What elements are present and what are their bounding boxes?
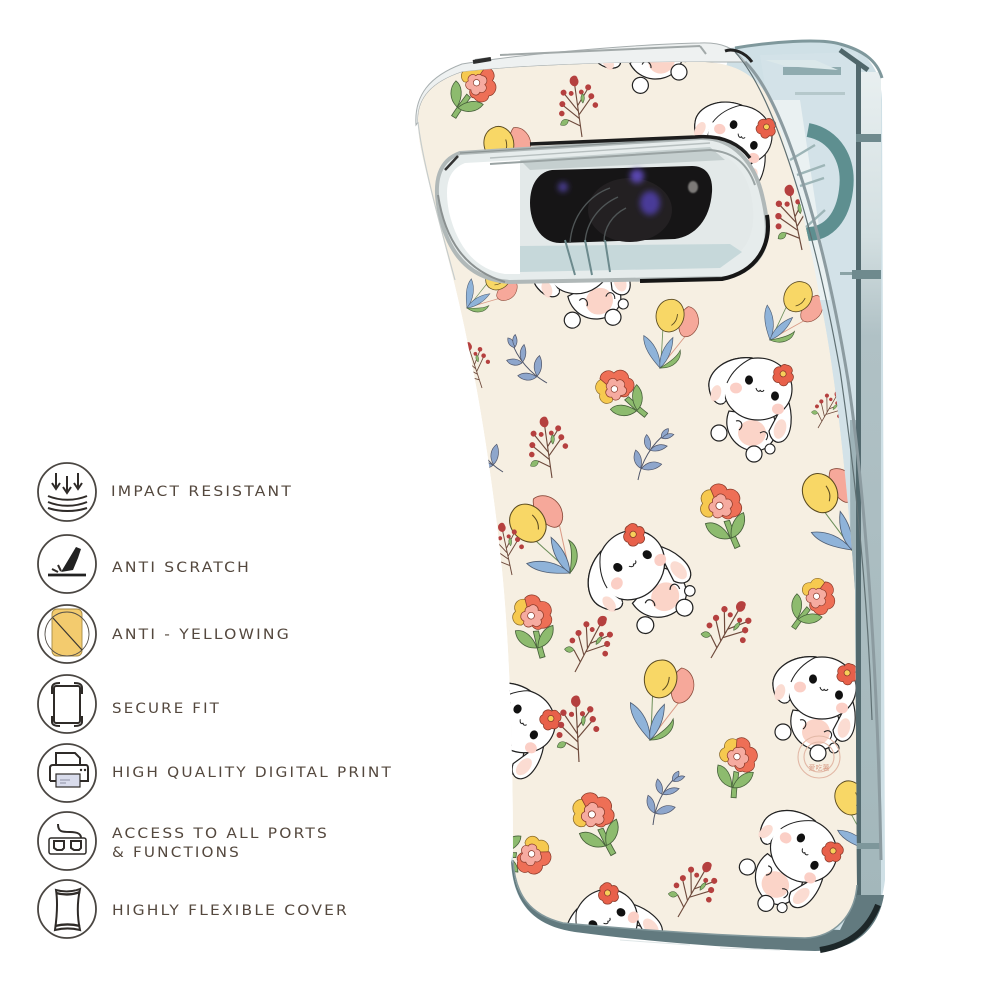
berry: right <box>700 601 752 658</box>
berry: lower left <box>556 696 600 762</box>
flower: top left <box>450 69 496 119</box>
bunny: top <box>598 62 688 94</box>
case edge strokes <box>418 50 881 938</box>
flower: mid <box>595 370 648 418</box>
berry: centre <box>564 616 613 672</box>
label: anti scratch: ANTI SCRATCH <box>112 560 251 576</box>
bunny: upper right <box>694 102 776 182</box>
camera cutout <box>437 137 768 282</box>
feature: access to all ports and functions <box>38 812 329 870</box>
clear case top rim <box>416 43 745 125</box>
feature: anti scratch <box>38 535 251 593</box>
feature: impact resistant <box>38 463 293 521</box>
bunny: left edge <box>510 682 562 780</box>
icon: flexible cover <box>38 880 96 938</box>
watermark stamp: 爱吃薯 <box>808 763 830 772</box>
feature: highly flexible cover <box>38 880 349 938</box>
bunny: lower right <box>738 810 844 914</box>
bunny: bottom <box>568 882 663 930</box>
icon: impact arrows <box>38 463 96 521</box>
berry: upper right <box>775 184 804 250</box>
label: anti yellowing: ANTI - YELLOWING <box>112 627 291 643</box>
flower: left <box>511 593 556 660</box>
berry: mid <box>529 416 568 478</box>
flower: lower left <box>572 792 619 856</box>
tulip: lower centre <box>630 660 694 741</box>
feature: secure fit <box>38 675 221 733</box>
berry: top <box>559 76 598 138</box>
bunny: right lower <box>772 657 862 761</box>
berry: bottom <box>668 862 718 918</box>
feature: anti yellowing <box>38 605 291 663</box>
label: high quality digital print: HIGH QUALITY DIGITAL PRINT <box>112 765 393 781</box>
flower: bottom left <box>512 836 552 874</box>
bunny: under camera <box>534 282 631 329</box>
icon: blade scratching surface <box>38 535 96 593</box>
sprig: left edge <box>488 444 504 472</box>
label: access to all ports: ACCESS TO ALL PORTS <box>112 826 329 842</box>
bunny: centre <box>588 523 696 634</box>
phone body behind case <box>511 41 885 951</box>
tulip: mid <box>643 298 699 369</box>
label: and functions: & FUNCTIONS <box>112 845 241 861</box>
label: impact resistant: IMPACT RESISTANT <box>111 484 293 500</box>
label: secure fit: SECURE FIT <box>112 701 221 717</box>
printed case back with pattern <box>418 62 857 938</box>
icon: ports <box>38 812 96 870</box>
feature list <box>38 463 393 938</box>
sprig: upper <box>506 334 548 384</box>
tulip: right <box>764 281 822 343</box>
berry: upper left edge <box>468 342 490 388</box>
berry: left edge <box>498 522 524 576</box>
tulip: below camera left <box>466 278 518 312</box>
icon: bumper case <box>38 675 96 733</box>
case clear bottom rim <box>511 860 884 951</box>
watermark stamp <box>798 736 840 778</box>
feature: high quality digital print <box>38 744 393 802</box>
icon: yellow case crossed <box>38 605 96 663</box>
camera lens bar <box>530 166 712 243</box>
flower: lower centre <box>717 737 758 798</box>
tulip: centre left <box>509 495 578 574</box>
flower: right <box>791 578 836 630</box>
tulip: above camera <box>483 126 532 150</box>
icon: printer <box>38 744 96 802</box>
rim detail <box>475 46 706 60</box>
flower: centre right <box>700 484 746 550</box>
bunny: mid right <box>708 358 798 462</box>
tulip: right edge <box>802 468 852 551</box>
sprig: mid <box>634 428 674 480</box>
label: highly flexible cover: HIGHLY FLEXIBLE COVER <box>112 903 349 919</box>
sprig: lower <box>646 770 686 825</box>
tulip: lower right edge <box>834 780 857 846</box>
berry: right edge <box>811 392 839 428</box>
